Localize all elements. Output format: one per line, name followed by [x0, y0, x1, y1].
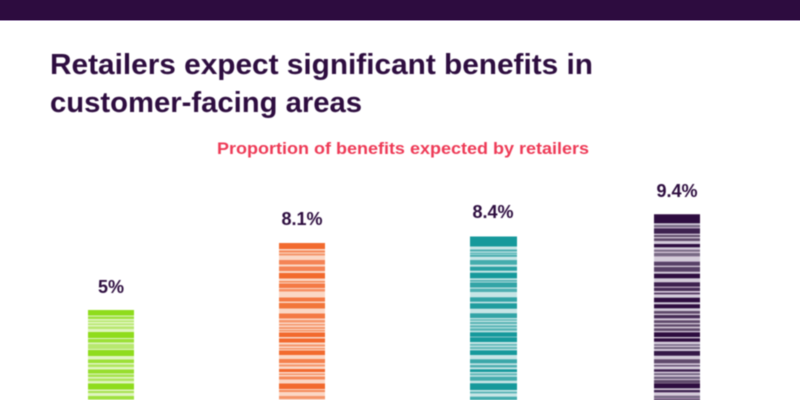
- chart subtitle: Proportion of benefits expected by retailers: [217, 139, 589, 158]
- bar: 9.4% purple: 9.4%: [656, 181, 698, 201]
- bar: 8.4% teal: [470, 202, 517, 400]
- bar: 5% green: 5%: [98, 277, 124, 297]
- bar: 5% green: [88, 277, 134, 400]
- title: Retailers expect significant benefits in: [50, 49, 593, 81]
- top banner: [0, 0, 800, 21]
- bar chart: proportion of benefits: [88, 181, 700, 400]
- bar: 8.4% teal: 8.4%: [472, 202, 514, 222]
- title: [50, 49, 593, 119]
- title: customer-facing areas: [50, 87, 362, 119]
- bar: 8.1% orange: [279, 209, 325, 400]
- bar: 8.1% orange: 8.1%: [281, 209, 323, 229]
- bar: 9.4% purple: [654, 181, 700, 400]
